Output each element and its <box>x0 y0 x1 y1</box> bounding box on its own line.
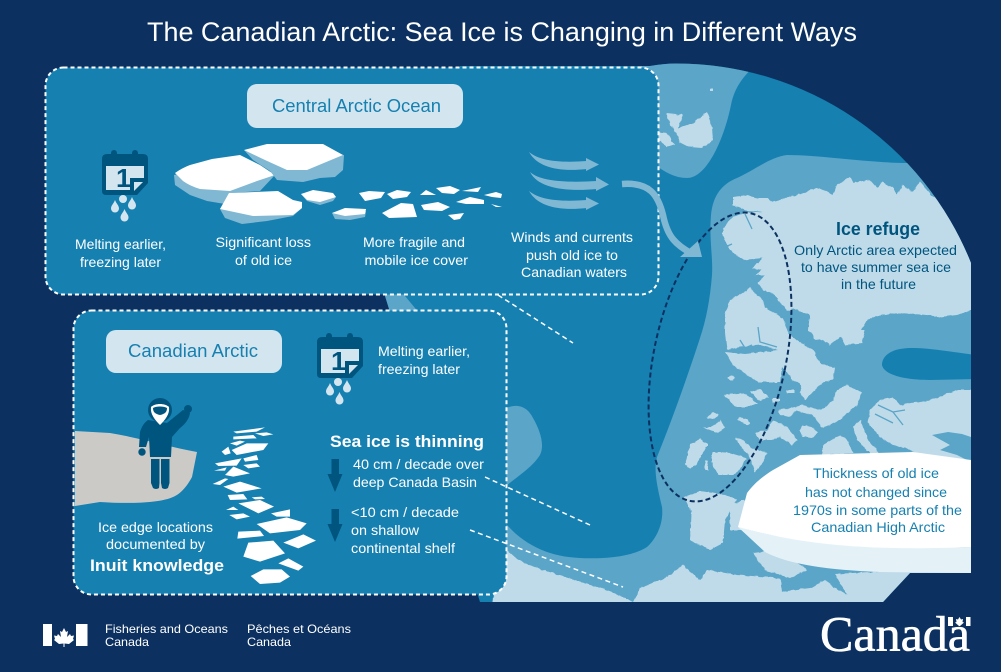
map of the Arctic <box>385 64 971 602</box>
panel captions: Canadian waters <box>521 264 627 280</box>
panel captions: More fragile and <box>363 234 465 250</box>
melting caption <box>378 343 470 377</box>
arrow: down 10 cm <box>328 509 342 542</box>
icon: calendar with drops: 1 <box>331 346 346 376</box>
leader lines <box>470 295 623 587</box>
department names: Canada <box>247 635 291 649</box>
panel: Canadian Arctic <box>74 310 506 594</box>
icon: Canadian flag <box>43 624 88 647</box>
small land near top <box>667 112 713 148</box>
panel background <box>46 68 658 294</box>
crescent islands <box>853 420 880 453</box>
melting caption: Melting earlier, <box>378 343 470 359</box>
icon: fragile broken ice <box>332 186 502 220</box>
land masses <box>490 89 990 620</box>
sea ice thinning text: deep Canada Basin <box>353 474 477 490</box>
sea ice thinning text: 40 cm / decade over <box>353 456 484 472</box>
sea ice thinning text <box>330 432 484 556</box>
ice edge floes <box>213 427 316 584</box>
ice refuge label <box>794 219 957 292</box>
ice block text: 1970s in some parts of the <box>793 502 962 518</box>
Ellesmere and northern land <box>723 177 990 345</box>
ice block underside <box>738 527 971 573</box>
ice block callout <box>738 452 971 573</box>
deep basin <box>882 348 975 380</box>
department names: Canada <box>105 635 149 649</box>
Baffin island <box>868 390 971 460</box>
ice block text: Thickness of old ice <box>813 465 939 481</box>
panel: central Arctic Ocean <box>46 68 658 294</box>
top shallow patch <box>640 64 748 178</box>
icon: calendar with drops <box>102 150 148 222</box>
department names: Fisheries and Oceans <box>105 622 228 636</box>
heading pill <box>106 330 282 373</box>
dashed ellipse: ice refuge area <box>625 199 815 515</box>
footer: Government of Canada signature <box>43 606 970 662</box>
ice block top <box>738 452 971 548</box>
icon: wind arrows <box>529 152 609 210</box>
shelf patch <box>506 406 542 485</box>
panel captions: Winds and currents <box>511 229 633 245</box>
ice refuge label: Only Arctic area expected <box>794 242 957 258</box>
inlets and channels <box>725 214 971 462</box>
hidden shelf patch by panels <box>385 294 416 310</box>
Canada wordmark: Canada <box>820 606 970 662</box>
Inuit knowledge caption: Ice edge locations <box>98 519 213 535</box>
ice refuge label: to have summer sea ice <box>801 259 951 275</box>
panel background <box>74 310 506 594</box>
icon: calendar with drops: 1 <box>116 163 131 193</box>
sea ice thinning text: <10 cm / decade <box>351 504 459 520</box>
heading pill: Canadian Arctic <box>128 341 258 361</box>
heading pill <box>247 84 463 128</box>
department names: Pêches et Océans <box>247 622 351 636</box>
arrow: down 40 cm <box>328 459 342 492</box>
panel captions: mobile ice cover <box>364 252 468 268</box>
Banks island <box>684 491 737 550</box>
peninsula island <box>778 385 862 428</box>
Inuit knowledge caption <box>90 519 224 575</box>
Inuit knowledge caption: Inuit knowledge <box>90 556 224 575</box>
panel captions: of old ice <box>235 252 292 268</box>
title: The Canadian Arctic: Sea Ice is Changing in Different Ways <box>147 17 857 47</box>
ice block text <box>793 465 962 535</box>
heading pill: Central Arctic Ocean <box>272 96 441 116</box>
continental shelf <box>503 155 1000 610</box>
department names <box>105 622 351 649</box>
ice refuge label: in the future <box>841 276 916 292</box>
panel captions <box>75 229 633 280</box>
Devon island group <box>725 288 835 400</box>
icon: large ice floes <box>174 144 344 224</box>
land edge <box>75 431 197 506</box>
sea ice thinning text: continental shelf <box>351 540 455 556</box>
panel captions: Significant loss <box>216 234 311 250</box>
panel captions: Melting earlier, <box>75 236 166 252</box>
panel captions: push old ice to <box>526 247 618 263</box>
sea ice thinning text: on shallow <box>351 522 420 538</box>
ice block text: Canadian High Arctic <box>811 519 945 535</box>
panel captions: freezing later <box>80 254 161 270</box>
ice block text: has not changed since <box>805 484 947 500</box>
sea ice thinning text: Sea ice is thinning <box>330 432 484 451</box>
icon: calendar with drops <box>317 333 363 404</box>
ice refuge label: Ice refuge <box>836 219 920 239</box>
Inuit knowledge caption: documented by <box>106 536 205 552</box>
icon: person waving <box>138 398 192 489</box>
arrow: ice pushed to Canadian waters <box>622 184 702 257</box>
mainland coast <box>490 545 990 620</box>
melting caption: freezing later <box>378 361 460 377</box>
